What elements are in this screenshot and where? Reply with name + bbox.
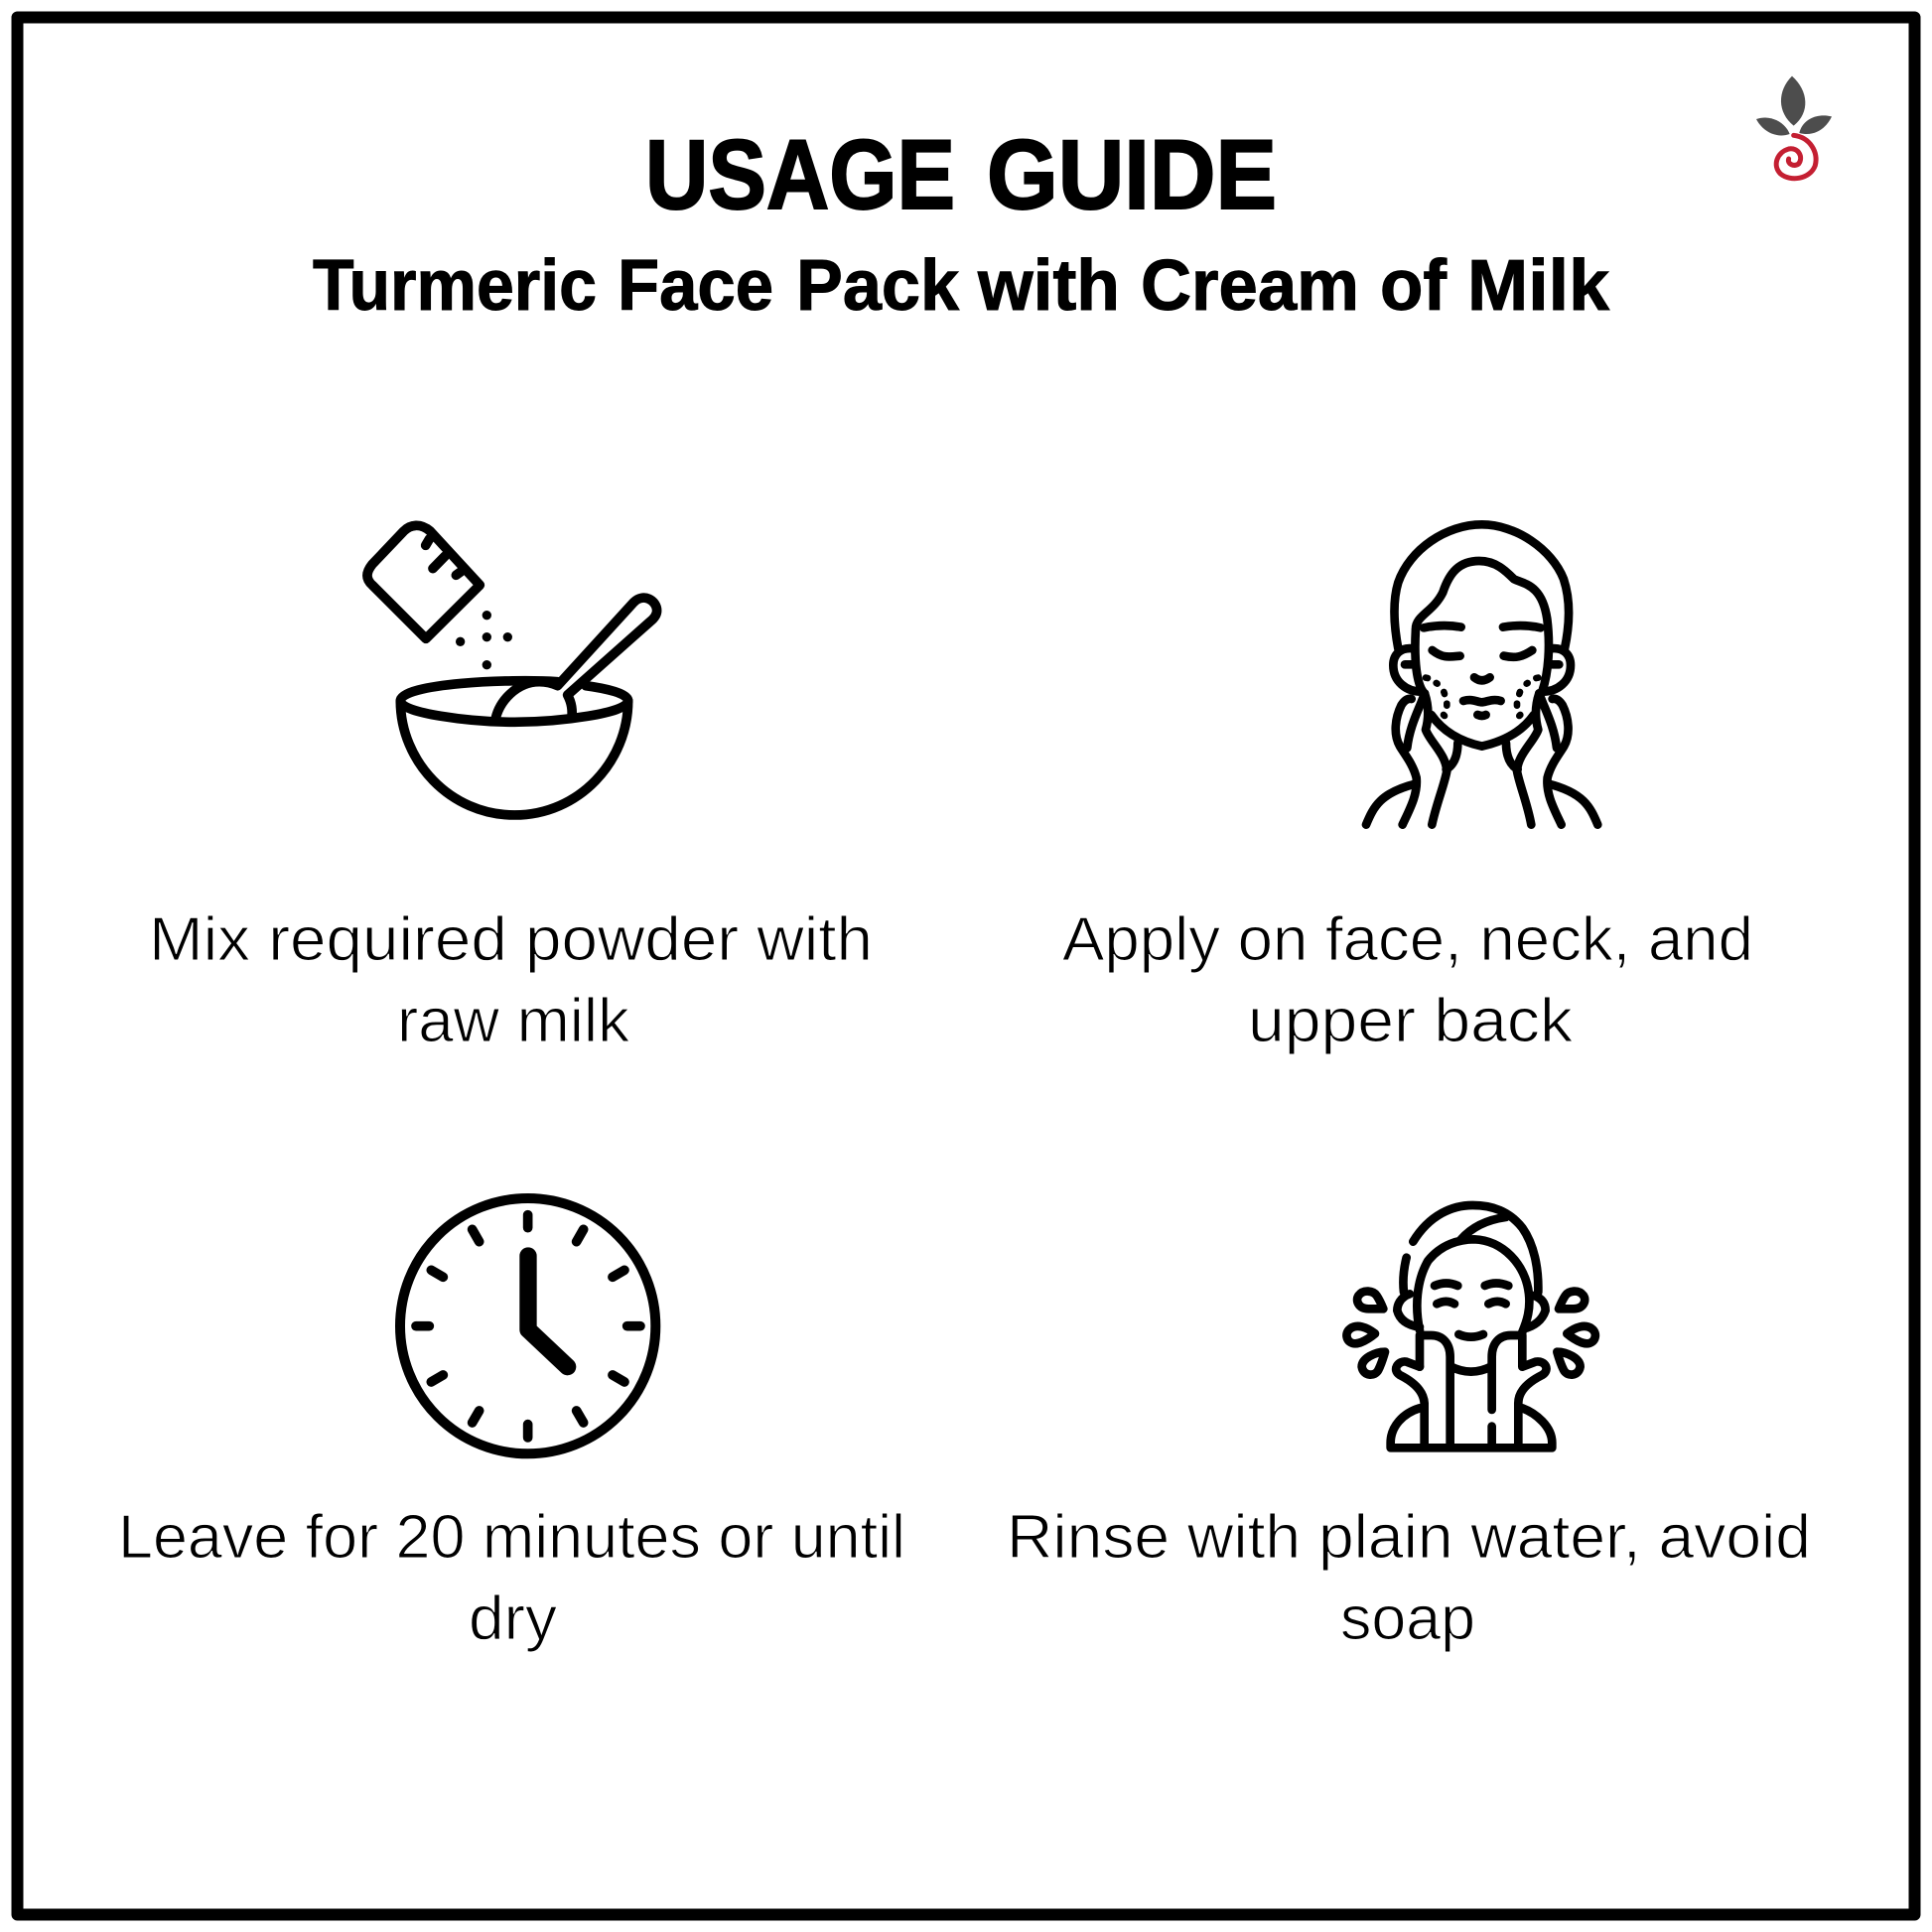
step 3: wait bbox=[118, 1198, 905, 1653]
title: USAGE bbox=[645, 119, 955, 229]
step 3 text: Leave for 20 minutes or until bbox=[118, 1503, 905, 1572]
step 1 text bbox=[149, 905, 873, 1055]
icon: face with hands applying pack bbox=[1366, 524, 1597, 825]
step 4 text: Rinse with plain water, avoid bbox=[1007, 1503, 1811, 1572]
subtitle: Cream bbox=[1141, 246, 1359, 326]
subtitle: Pack bbox=[796, 246, 960, 326]
step 4 text: soap bbox=[1340, 1585, 1475, 1653]
icon: clock bbox=[400, 1198, 655, 1453]
step 3 text: dry bbox=[469, 1585, 557, 1653]
title: GUIDE bbox=[987, 119, 1277, 229]
subtitle bbox=[313, 246, 1610, 326]
step 2 text: upper back bbox=[1248, 987, 1574, 1055]
step 1: mix bbox=[149, 525, 873, 1055]
subtitle: Turmeric bbox=[313, 246, 597, 326]
step 3 text bbox=[118, 1503, 905, 1653]
step 2 text bbox=[1062, 905, 1753, 1055]
icon: brand logo bbox=[1756, 76, 1832, 179]
step 4: rinse bbox=[1007, 1205, 1811, 1653]
step 2: apply bbox=[1062, 524, 1753, 1055]
icon: person rinsing face with water splashes bbox=[1346, 1205, 1595, 1448]
step 4 text bbox=[1007, 1503, 1811, 1653]
icon: powder packet and mixing bowl bbox=[367, 525, 657, 815]
subtitle: of bbox=[1380, 246, 1448, 326]
title bbox=[645, 119, 1277, 229]
step 1 text: Mix required powder with bbox=[149, 905, 873, 974]
step 2 text: Apply on face, neck, and bbox=[1062, 905, 1753, 974]
subtitle: with bbox=[977, 246, 1120, 326]
step 1 text: raw milk bbox=[397, 987, 630, 1055]
subtitle: Milk bbox=[1467, 246, 1610, 326]
subtitle: Face bbox=[618, 246, 773, 326]
